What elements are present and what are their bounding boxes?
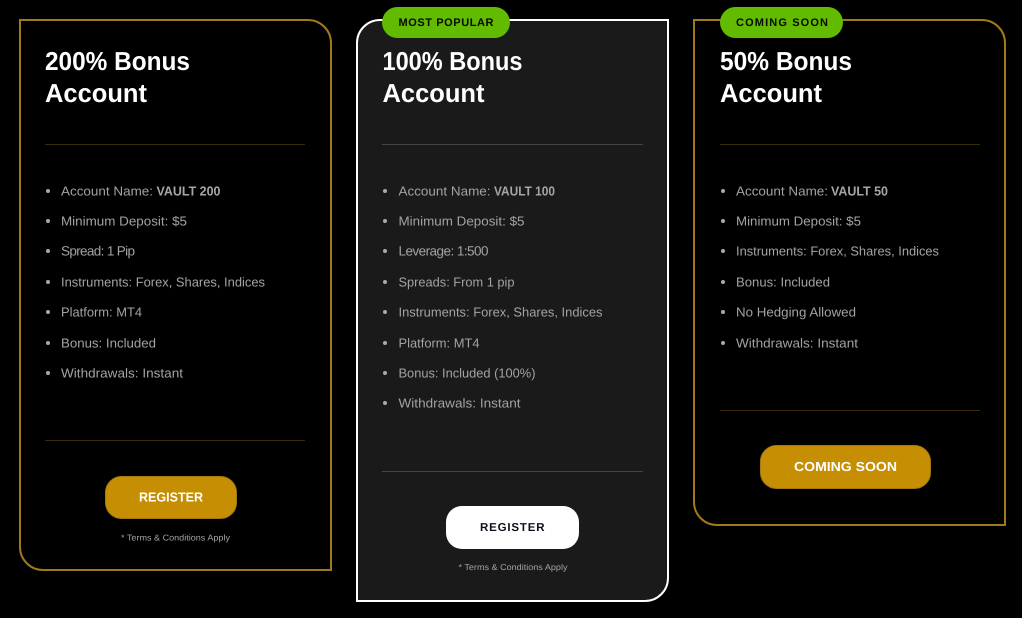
badge: most popular: MOST POPULAR — [398, 17, 494, 29]
feature list: Withdrawals: Instant — [398, 396, 521, 410]
feature list: Account Name: — [736, 184, 828, 198]
feature list: VAULT 50 — [831, 184, 888, 198]
terms note: * Terms & Conditions Apply — [121, 532, 231, 542]
feature list: Platform: MT4 — [398, 336, 480, 350]
badge: most popular — [382, 7, 510, 38]
heading: Account — [720, 78, 822, 108]
feature list — [383, 184, 603, 410]
heading: Account — [45, 78, 147, 108]
panel: 200% bonus account — [20, 20, 331, 570]
badge: coming soon: COMING SOON — [736, 17, 828, 29]
coming soon button: COMING SOON — [794, 459, 897, 474]
card frame — [20, 20, 331, 570]
feature list: Withdrawals: Instant — [736, 336, 858, 350]
feature list: Account Name: — [61, 184, 153, 198]
feature list: Instruments: Forex, Shares, Indices — [61, 274, 265, 290]
feature list: Spreads: From 1 pip — [398, 274, 514, 290]
feature list: Withdrawals: Instant — [61, 366, 183, 380]
card frame — [694, 20, 1005, 525]
feature list: VAULT 100 — [494, 184, 555, 198]
feature list — [46, 184, 265, 380]
feature list: Account Name: — [398, 184, 490, 198]
feature list: Bonus: Included — [736, 274, 830, 290]
terms note: * Terms & Conditions Apply — [458, 562, 568, 572]
feature list: Bonus: Included (100%) — [398, 366, 536, 380]
heading — [720, 46, 852, 108]
register button — [106, 476, 236, 518]
heading: 100% Bonus — [382, 46, 522, 76]
register button — [446, 506, 579, 549]
feature list: Minimum Deposit: $5 — [736, 214, 861, 228]
feature list: Spread: 1 Pip — [61, 244, 135, 258]
heading: 200% Bonus — [45, 46, 190, 76]
feature list: VAULT 200 — [156, 184, 220, 198]
feature list: Minimum Deposit: $5 — [61, 214, 187, 228]
card frame — [357, 20, 668, 601]
heading: Account — [382, 78, 485, 108]
heading — [45, 46, 190, 108]
feature list: Minimum Deposit: $5 — [398, 214, 524, 228]
feature list: Platform: MT4 — [61, 304, 142, 320]
register button: REGISTER — [480, 522, 545, 534]
badge: coming soon — [720, 7, 843, 38]
heading — [382, 46, 522, 108]
feature list — [721, 184, 939, 350]
register button: REGISTER — [139, 490, 204, 504]
panel: 100% bonus account — [357, 7, 668, 601]
feature list: Instruments: Forex, Shares, Indices — [736, 244, 939, 258]
feature list: Bonus: Included — [61, 336, 156, 350]
feature list: Leverage: 1:500 — [398, 244, 488, 258]
coming soon button — [760, 446, 930, 488]
feature list: Instruments: Forex, Shares, Indices — [398, 304, 603, 320]
panel: 50% bonus account — [694, 7, 1005, 525]
heading: 50% Bonus — [720, 46, 852, 76]
feature list: No Hedging Allowed — [736, 304, 856, 320]
